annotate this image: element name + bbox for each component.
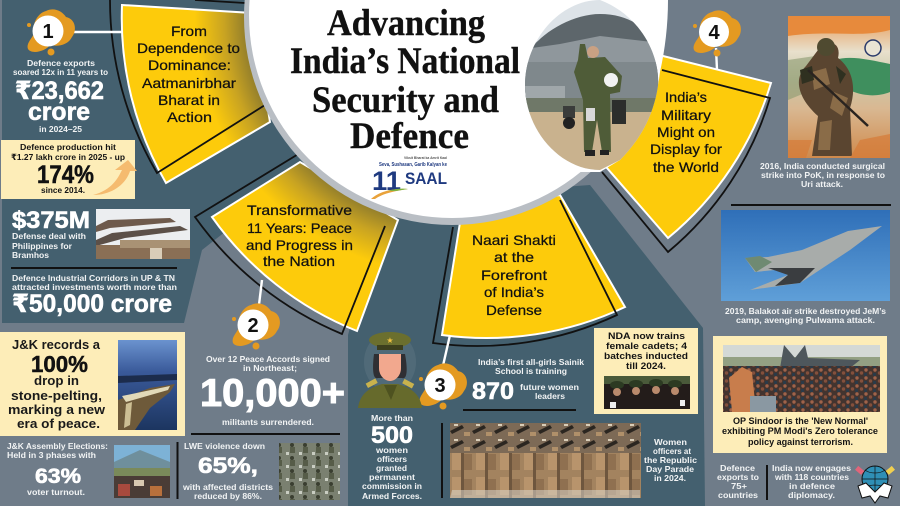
title [290, 3, 520, 157]
text: exports to 75+: exports to [717, 472, 759, 482]
badge 2 [232, 303, 280, 350]
text: defence exports: Defence exports [27, 58, 95, 68]
photo: soldier painting [788, 16, 890, 158]
title: Defence [350, 116, 469, 157]
wedge 3: Naari Shakti [433, 195, 625, 346]
text: industrial corridors: ₹50,000 crore [12, 290, 172, 318]
callout: J&K stone pelting [0, 332, 185, 436]
centre title circle [244, 0, 668, 225]
text: Sainik school: School is training [495, 366, 567, 376]
text: peace accords: Over 12 Peace Accords signed [206, 354, 330, 364]
text: defence diplomacy: diplomacy. [788, 490, 835, 500]
text: peace accords [200, 354, 345, 427]
callout: Op Sindoor: policy against terrorism. [748, 437, 853, 447]
text: LWE violence: reduced by 86%. [194, 491, 262, 501]
text: surgical strike: 2016, India conducted surgical [760, 161, 885, 171]
text: defence exports: in 2024–25 [39, 124, 82, 134]
wedge 3: Naari Shakti: Defense [486, 302, 542, 318]
title: Advancing [327, 3, 485, 44]
text: Brahmos deal: Bramhos [12, 250, 49, 260]
badge 4: 4 [708, 22, 720, 44]
badge 3 [419, 363, 467, 410]
divider [11, 267, 177, 269]
callout: defence production: Defence production hit [20, 142, 116, 152]
text: industrial corridors: attracted investments worth more than [12, 282, 177, 292]
text: J&K elections: J&K Assembly Elections: [7, 441, 108, 451]
callout: NDA cadets: till 2024. [626, 361, 666, 371]
callout: defence production [1, 140, 137, 199]
connector lines [72, 32, 717, 370]
callout: J&K stone pelting: era of peace. [17, 416, 100, 431]
callout: NDA cadets: batches inducted [604, 351, 688, 361]
wedge 2: Transformative 11 Years: Transformative [247, 202, 352, 218]
photo: MiG in flight [721, 210, 890, 301]
text: exports to 75+ [717, 463, 759, 500]
callout: Op Sindoor: OP Sindoor is the 'New Normal' [733, 416, 868, 426]
divider [176, 442, 178, 499]
text: Balakot: camp, avenging Pulwama attack. [736, 315, 875, 325]
divider [441, 423, 443, 498]
text: Republic Day parade: in 2024. [654, 473, 686, 483]
text: Balakot [725, 306, 886, 325]
wedge 1: Aatmanirbhar Bharat: Dependence to [137, 40, 240, 56]
divider [191, 433, 340, 435]
text: LWE violence [182, 441, 273, 501]
text: 500 women officers: commission in [362, 481, 422, 491]
text: Republic Day parade: Day Parade [646, 464, 694, 474]
callout: Op Sindoor: exhibiting PM Modi's Zero tolerance [722, 426, 878, 436]
text: defence exports: soared 12x in 11 years to [13, 67, 108, 77]
text: Republic Day parade: officers at [653, 446, 691, 456]
text: Republic Day parade: Women [654, 437, 687, 447]
callout: J&K stone pelting: J&K records a [12, 337, 101, 352]
wedge 1: Aatmanirbhar Bharat [110, 0, 270, 183]
photo: Republic Day parade [450, 423, 641, 498]
callout: NDA cadets [594, 328, 698, 414]
title: India’s National [290, 41, 520, 82]
text: LWE violence: 65%, [198, 453, 258, 478]
wedge 2: Transformative 11 Years: and Progress in [246, 237, 353, 253]
text: peace accords: militants surrendered. [222, 417, 314, 427]
text: defence diplomacy: in defence [789, 481, 835, 491]
panel: dark left backdrop [2, 0, 310, 323]
badge 2: 2 [247, 315, 259, 337]
wedge 4: Military Might: the World [653, 159, 719, 175]
wedge 1: Aatmanirbhar Bharat: Bharat in [158, 92, 220, 108]
photo: missiles [96, 209, 190, 259]
callout: defence production: ₹1.27 lakh crore in 2025 - up [11, 152, 125, 162]
icon: woman officer: ★ [386, 336, 394, 345]
text: defence exports: ₹23,662 [15, 77, 104, 105]
title: Security and [312, 80, 499, 121]
divider [463, 409, 576, 411]
badge 1: 1 [42, 21, 54, 43]
text: J&K elections [7, 441, 108, 497]
divider [731, 204, 891, 206]
text: industrial corridors [12, 273, 177, 318]
logo: 11 Saal: Viksit Bharat ka Amrit Kaal [404, 156, 447, 160]
text: defence exports [13, 58, 108, 134]
text: defence diplomacy: India now engages [772, 463, 851, 473]
callout: J&K stone pelting: stone-pelting, [11, 388, 102, 403]
wedge 3: Naari Shakti: of India’s [484, 284, 544, 300]
text: surgical strike [760, 161, 885, 189]
photo: patrol bikes [279, 443, 340, 500]
text: 500 women officers: permanent [369, 472, 415, 482]
text: Brahmos deal: $375M [12, 207, 90, 234]
text: industrial corridors: Defence Industrial Corridors in UP & TN [12, 273, 175, 283]
callout: defence production: 174% [37, 161, 94, 189]
logo: 11 Saal: Seva, Sushasan, Garib Kalyan ke [379, 162, 447, 168]
text: exports to 75+: countries [718, 490, 758, 500]
icon: woman officer [358, 332, 422, 408]
text: Republic Day parade [644, 437, 697, 483]
wedge 2: Transformative 11 Years [195, 153, 398, 334]
photo: PM with fighter jet [520, 0, 660, 172]
text: Sainik school: India’s first all-girls Sainik [478, 357, 584, 367]
text: 500 women officers: officers [377, 454, 407, 464]
wedge 1: Aatmanirbhar Bharat: From [171, 23, 207, 39]
text: J&K elections: 63% [35, 465, 81, 488]
text: Sainik school: 870 [472, 378, 514, 405]
wedge 3: Naari Shakti: Naari Shakti [472, 232, 556, 248]
text: 500 women officers: 500 [371, 422, 413, 449]
photo: PM with troops [723, 345, 880, 412]
text: J&K elections: Held in 3 phases with [7, 450, 96, 460]
icon: globe and handshake [855, 466, 895, 503]
callout: NDA cadets: NDA now trains [608, 331, 685, 341]
wedge 1: Aatmanirbhar Bharat: Aatmanirbhar [142, 75, 236, 91]
text: LWE violence: LWE violence down [184, 441, 265, 451]
badge 4 [693, 10, 741, 56]
text: Sainik school: leaders [535, 391, 565, 401]
text: 500 women officers: Armed Forces. [362, 491, 422, 501]
text: Brahmos deal: Defense deal with [12, 231, 86, 241]
divider [766, 465, 768, 500]
wedge 4: Military Might: India’s [665, 89, 707, 105]
callout: J&K stone pelting: drop in [34, 373, 79, 388]
text: surgical strike: strike into PoK, in response to [761, 170, 885, 180]
logo: 11 Saal: SAAL [405, 169, 447, 188]
callout: defence production: since 2014. [41, 185, 85, 195]
text: peace accords: in Northeast; [243, 363, 297, 373]
wedge 2: Transformative 11 Years: 11 Years: Peace [247, 220, 352, 236]
text: surgical strike: Uri attack. [801, 179, 843, 189]
wedge 1: Aatmanirbhar Bharat: Action [167, 109, 212, 125]
text: 500 women officers: granted [376, 463, 407, 473]
text: LWE violence: with affected districts [182, 482, 273, 492]
wedge 4: Military Might: Display for [650, 141, 722, 157]
text: defence exports: crore [28, 98, 90, 126]
wedge 4: Military Might: Military [661, 107, 711, 123]
text: Sainik school: future women [520, 382, 579, 392]
wedge 3: Naari Shakti: at the [494, 249, 534, 265]
photo: Dal lake boat [118, 340, 177, 430]
wedge 2: Transformative 11 Years: the Nation [263, 253, 335, 269]
text: 500 women officers: More than [371, 413, 413, 423]
logo: 11 Saal [371, 156, 447, 199]
wedge 4: Military Might: Might on [657, 124, 715, 140]
callout: J&K stone pelting: 100% [31, 351, 88, 377]
text: Republic Day parade: the Republic [644, 455, 697, 465]
photo: NDA cadets [604, 376, 690, 409]
callout: Op Sindoor [713, 336, 887, 453]
callout: J&K stone pelting: marking a new [8, 402, 106, 417]
text: 500 women officers: women [375, 445, 408, 455]
callout: NDA cadets: female cadets; 4 [606, 341, 687, 351]
text: defence diplomacy [772, 463, 851, 500]
text: 500 women officers [362, 413, 422, 501]
wedge 3: Naari Shakti: Forefront [481, 267, 547, 283]
panel: dark centre backdrop [348, 185, 705, 506]
logo: 11 Saal: 11 [372, 166, 401, 196]
text: Brahmos deal: Philippines for [12, 241, 73, 251]
photo: voters queue [114, 445, 170, 498]
text: exports to 75+: Defence [720, 463, 755, 473]
wedge 4: Military Might [600, 54, 771, 252]
wedge 1: Aatmanirbhar Bharat: Dominance: [148, 57, 231, 73]
text: J&K elections: voter turnout. [27, 487, 85, 497]
text: Sainik school [472, 357, 584, 405]
badge 3: 3 [434, 375, 446, 397]
text: exports to 75+: 75+ [731, 481, 747, 491]
text: defence diplomacy: with 118 countries [774, 472, 849, 482]
text: Brahmos deal [12, 207, 90, 260]
badge 1 [27, 9, 75, 56]
text: peace accords: 10,000+ [200, 372, 345, 415]
text: Balakot: 2019, Balakot air strike destroyed JeM’s [725, 306, 886, 316]
